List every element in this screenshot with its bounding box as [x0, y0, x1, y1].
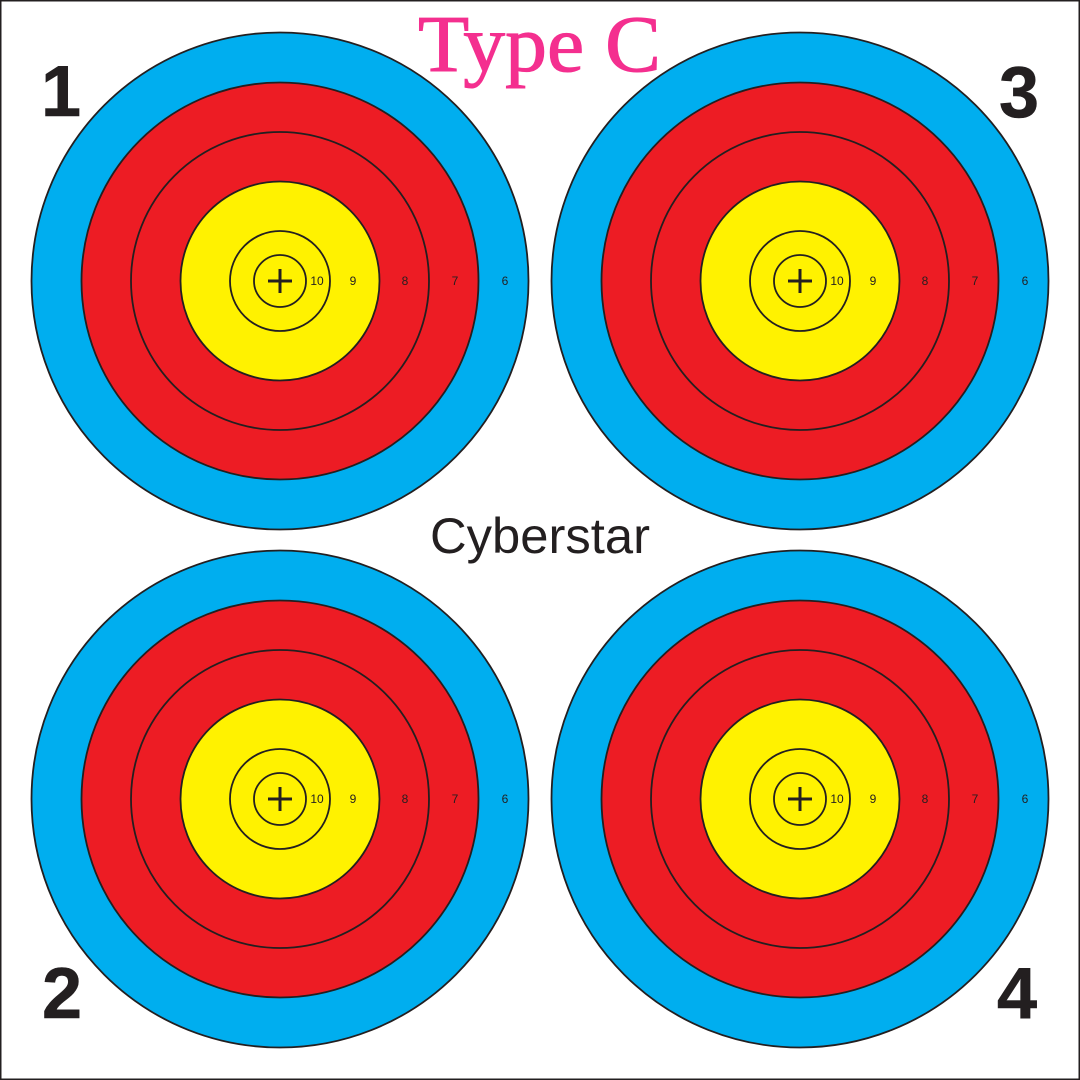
target 1: 9 — [350, 274, 357, 288]
target 2 — [32, 550, 528, 1048]
target 2: 7 — [452, 792, 459, 806]
target 2: 8 — [402, 792, 409, 806]
target number 1: 1 — [41, 52, 81, 132]
target 1: 10 — [310, 274, 324, 288]
target 4: 6 — [1022, 792, 1029, 806]
target 2: 6 — [502, 792, 509, 806]
target 1 — [32, 32, 528, 530]
target 4: 7 — [972, 792, 979, 806]
target 1: 6 — [502, 274, 509, 288]
title: Type C — [418, 1, 661, 89]
target 3: 10 — [830, 274, 844, 288]
target number 4: 4 — [997, 954, 1037, 1034]
target 3: 8 — [922, 274, 929, 288]
target 4: 9 — [870, 792, 877, 806]
target 4 — [552, 550, 1048, 1048]
target 2: 10 — [310, 792, 324, 806]
target 4: 10 — [830, 792, 844, 806]
target number 2: 2 — [42, 954, 82, 1034]
target 4: 8 — [922, 792, 929, 806]
target 1: 7 — [452, 274, 459, 288]
target 2: 9 — [350, 792, 357, 806]
target 1: 8 — [402, 274, 409, 288]
target 3: 6 — [1022, 274, 1029, 288]
subtitle: Cyberstar: Cyberstar — [430, 508, 650, 564]
target 3: 7 — [972, 274, 979, 288]
target 3 — [552, 32, 1048, 530]
target number 3: 3 — [999, 53, 1039, 133]
target 3: 9 — [870, 274, 877, 288]
